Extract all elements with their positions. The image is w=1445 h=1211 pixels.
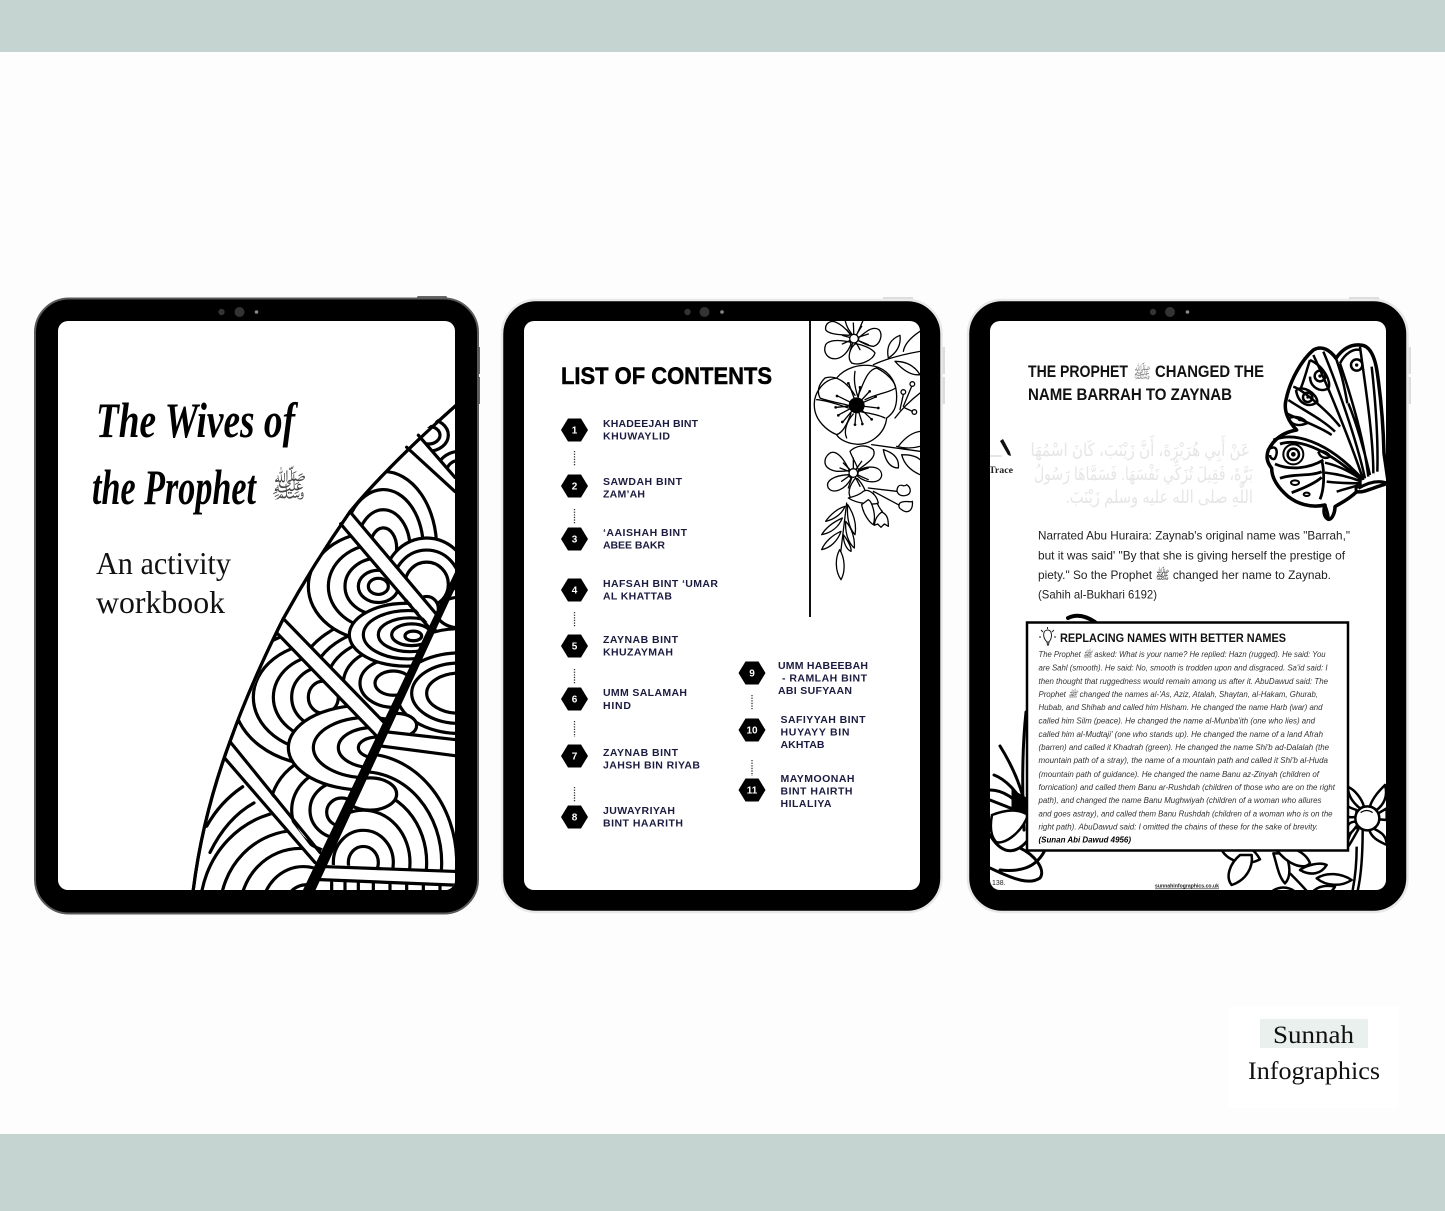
item 1: KHUWAYLID	[603, 430, 670, 442]
arabic tracing text: عَنْ أَبِي هُرَيْرَةَ، أَنَّ زَيْنَبَ، كَانَ اسْمُهَا	[1031, 435, 1250, 462]
item 7: 7	[572, 752, 578, 762]
page heading	[1028, 362, 1264, 404]
callout body: fornication) and called them Banu ar-Rushdah (children of those who are on the right	[1038, 783, 1336, 792]
item 6: HIND	[603, 700, 631, 712]
bottom daisy and right daisy	[1222, 785, 1387, 895]
trace label: Trace	[989, 466, 1013, 476]
cover title	[92, 392, 298, 515]
callout heading: REPLACING NAMES WITH BETTER NAMES	[1060, 631, 1286, 645]
item 10: SAFIYYAH BINT	[780, 714, 866, 726]
item 7: ZAYNAB BINT	[603, 747, 679, 759]
item 7: JAHSH BIN RIYAB	[603, 760, 700, 772]
item 10: HUYAYY BIN	[780, 726, 850, 738]
top band	[0, 0, 1445, 52]
item 11: HILALIYA	[780, 798, 832, 810]
callout body: called him al-Mudtaji' (one who stands up). He changed the name of a land Afrah	[1038, 730, 1324, 739]
item 8: 8	[572, 812, 578, 824]
item 9: 9	[749, 668, 755, 680]
connector 9	[751, 695, 753, 710]
item 8: BINT HAARITH	[603, 818, 683, 830]
icon: light bulb	[1039, 627, 1056, 645]
page heading: ﷺ	[1133, 362, 1151, 382]
callout body: and goes astray), and called them Banu Rushdah (children of a woman who is on the	[1038, 810, 1333, 818]
item 1: KHADEEJAH BINT	[603, 418, 699, 430]
callout body: (Sunan Abi Dawud 4956)	[1038, 836, 1131, 844]
callout box: replacing names	[1027, 622, 1348, 850]
item 8: JUWAYRIYAH	[603, 805, 675, 817]
callout body: The Prophet ﷺ asked: What is your name? He replied: Hazn (rugged). He said: You	[1038, 648, 1326, 659]
callout body: mountain path of a stray), the name of a mountain path and called it Shi'b al-Huda	[1038, 756, 1329, 765]
item 11: MAYMOONAH	[780, 773, 854, 785]
callout body: path), and changed the name Banu Mughwiyah (children of a woman who allures	[1038, 796, 1322, 805]
website url: sunnahinfographics.co.uk	[1155, 884, 1220, 890]
cover subtitle	[96, 545, 231, 620]
connector 1	[574, 451, 576, 466]
item 8	[561, 805, 683, 830]
item 3: ‘AAISHAH BINT	[603, 527, 688, 539]
heading: list of contents: LIST OF CONTENTS	[561, 363, 772, 390]
item 11	[738, 773, 854, 810]
logo: Sunnah Infographics: Infographics	[1248, 1058, 1380, 1085]
leaf mandala illustration	[192, 404, 455, 890]
item 1	[561, 418, 699, 442]
callout body: Hubab, and Shihab and called him Hisham. He changed the name Harb (war) and	[1038, 703, 1323, 712]
item 4	[561, 578, 718, 602]
logo: Sunnah Infographics: Sunnah	[1273, 1022, 1355, 1049]
connector 5	[574, 669, 576, 684]
tablet frame	[968, 297, 1411, 912]
item 10: AKHTAB	[780, 739, 825, 751]
hadith translation: (Sahih al-Bukhari 6192)	[1038, 588, 1157, 602]
item 6: UMM SALAMAH	[603, 687, 687, 699]
contents column 2	[738, 660, 868, 810]
item 7	[561, 744, 700, 772]
item 1: 1	[572, 426, 578, 436]
page heading: CHANGED THE	[1155, 363, 1264, 381]
item 5: 5	[572, 642, 578, 652]
item 3: 3	[572, 534, 578, 546]
item 6	[561, 687, 687, 712]
callout body: (mountain path of guidance). He changed the name Banu az-Zinyah (children of	[1038, 770, 1320, 779]
tablet 3: worksheet page	[968, 297, 1411, 912]
vertical divider	[809, 321, 811, 617]
hadith translation: but it was said' "By that she is giving herself the prestige of	[1038, 548, 1346, 562]
callout body: right path). AbuDawud said: I omitted the chains of these for the sake of brevity.	[1038, 822, 1318, 832]
arabic tracing text: بَرَّةَ، فَقِيلَ تُزَكِّي نَفْسَهَا. فَسَمَّاهَا رَسُولُ	[1034, 458, 1254, 486]
logo: Sunnah Infographics	[1229, 1006, 1398, 1108]
big flower	[814, 365, 897, 444]
floral illustration	[814, 320, 920, 580]
cover title: the Prophet	[92, 459, 257, 515]
hadith translation	[1038, 528, 1350, 602]
cover subtitle: workbook	[96, 584, 225, 620]
bottom band	[0, 1134, 1445, 1211]
callout body	[1038, 648, 1336, 844]
callout body: are Sahl (smooth). He said: No, smooth is trodden upon and disgraced. Sa'id said: I	[1038, 664, 1328, 672]
item 4: AL KHATTAB	[603, 590, 672, 602]
tablet 2: list of contents	[502, 297, 945, 912]
tablet frame	[502, 297, 945, 912]
item 10: 10	[746, 726, 758, 736]
hadith translation: piety." So the Prophet ﷺ changed her name to Zaynab.	[1038, 566, 1331, 582]
cover subtitle: An activity	[96, 545, 231, 581]
item 11: BINT HAIRTH	[780, 786, 852, 798]
icon: pen	[990, 439, 1011, 456]
connector 10	[751, 760, 753, 776]
connector 7	[574, 787, 576, 802]
item 11: 11	[747, 786, 758, 796]
connector 6	[574, 721, 576, 737]
tablet 1: workbook cover	[34, 296, 480, 914]
trace hint	[989, 439, 1013, 476]
callout body: then thought that ruggedness would remain among us after it. AbuDawud said: The	[1038, 677, 1329, 686]
callout body: called him Silm (peace). He changed the name al-Munba'ith (one who lies) and	[1038, 716, 1316, 726]
item 2: SAWDAH BINT	[603, 476, 683, 488]
item 9	[738, 660, 868, 697]
leaf sprig	[822, 505, 856, 580]
item 5	[561, 634, 679, 658]
cover title: The Wives of	[96, 392, 298, 448]
item 4: HAFSAH BINT ‘UMAR	[603, 578, 718, 590]
callout body: (barren) and called it Khadrah (green). He changed the name Shi'b ad-Dalalah (the	[1038, 743, 1330, 752]
item 2: 2	[572, 482, 578, 492]
top flower	[825, 320, 881, 364]
arabic tracing text: اللَّهِ صلى الله عليه وسلم زَيْنَبَ.	[1066, 480, 1253, 508]
item 5: ZAYNAB BINT	[603, 634, 679, 646]
item 3	[561, 527, 688, 552]
item 2	[561, 474, 683, 500]
callout body: Prophet ﷺ changed the names al-'As, Aziz, Atalah, Shaytan, al-Hakam, Ghurab,	[1038, 688, 1318, 699]
page heading: THE PROPHET	[1028, 363, 1128, 381]
tablet frame	[35, 296, 480, 914]
arabic tracing text	[1031, 435, 1254, 508]
item 4: 4	[572, 586, 578, 596]
page number: 138.	[992, 880, 1006, 887]
item 9: - RAMLAH BINT	[782, 672, 868, 684]
honorific symbol: ﷺ	[271, 465, 307, 504]
lower flower	[825, 446, 882, 502]
item 5: KHUZAYMAH	[603, 646, 673, 658]
item 6: 6	[572, 694, 578, 706]
connector 2	[574, 509, 576, 524]
item 2: ZAM’AH	[603, 488, 645, 500]
page heading: NAME BARRAH TO ZAYNAB	[1028, 386, 1232, 404]
contents column 1	[561, 418, 718, 830]
item 3: ABEE BAKR	[603, 540, 665, 552]
item 10	[738, 714, 866, 751]
butterfly illustration	[1267, 345, 1388, 519]
connector 4	[574, 612, 576, 627]
floral page border	[990, 616, 1387, 895]
item 9: UMM HABEEBAH	[778, 660, 868, 672]
item 9: ABI SUFYAAN	[778, 685, 852, 697]
hadith translation: Narrated Abu Huraira: Zaynab's original name was "Barrah,"	[1038, 528, 1350, 542]
